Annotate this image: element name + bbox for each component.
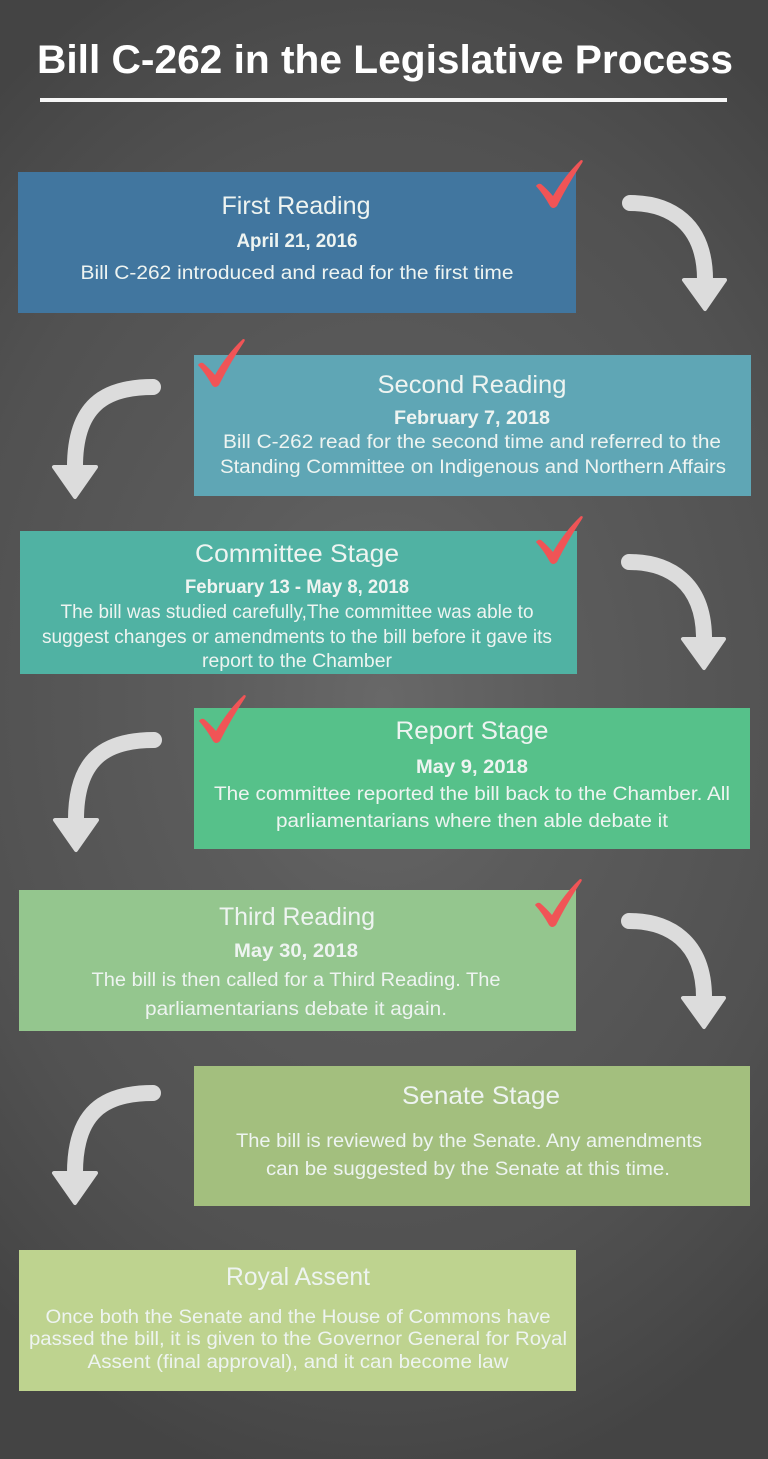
panel: Second Reading [194,355,751,496]
icon: check mark 2 [198,339,245,387]
panel: Third Reading [19,890,576,1031]
panel: Royal Assent: Royal Assent [226,1263,370,1291]
panel: Senate Stage: The bill is reviewed by the Senate. Any amendments [236,1131,702,1152]
panel: Royal Assent: Assent (final approval), and it can become law [88,1352,509,1373]
panel: Report Stage: May 9, 2018 [416,757,528,778]
panel: Report Stage: parliamentarians where then able debate it [276,811,669,832]
icon: check mark 3 [536,516,583,564]
arrow 1 [630,203,725,309]
panel: Committee Stage: report to the Chamber [202,651,393,672]
panel: Report Stage: Report Stage [396,717,548,745]
panel: First Reading: Bill C-262 introduced and read for the first time [80,263,514,284]
panel: Senate Stage [194,1066,750,1206]
panel: Committee Stage: February 13 - May 8, 2018 [185,577,409,598]
panel: Third Reading: The bill is then called for a Third Reading. The [92,970,500,991]
panel: First Reading: First Reading [222,192,370,220]
arrow 6 [54,1093,153,1203]
title: Bill C-262 in the Legislative Process [37,38,733,82]
panel: Third Reading: Third Reading [219,903,375,931]
icon: check mark 5 [535,879,582,927]
arrow 2 [54,387,153,497]
panel: Third Reading: May 30, 2018 [234,941,358,962]
panel: Royal Assent: passed the bill, it is given to the Governor General for Royal [29,1329,567,1350]
icon: check mark 4 [199,695,246,743]
panel: Royal Assent: Once both the Senate and the House of Commons have [46,1307,550,1328]
panel: Third Reading: parliamentarians debate it again. [145,999,447,1020]
panel: Second Reading: Bill C-262 read for the second time and referred to the [223,432,721,453]
panel: Royal Assent [19,1250,576,1391]
panel: Second Reading: February 7, 2018 [394,408,550,429]
arrow 5 [629,921,724,1027]
panel: Committee Stage: suggest changes or amendments to the bill before it gave its [42,627,552,648]
panel: Senate Stage: Senate Stage [402,1082,560,1110]
panel: First Reading: April 21, 2016 [236,231,358,252]
panel: Second Reading: Second Reading [378,371,566,399]
panel: Committee Stage [20,531,577,674]
arrow 3 [629,562,724,668]
panel: Report Stage [194,708,750,849]
panel: First Reading [18,172,576,313]
panel: Report Stage: The committee reported the bill back to the Chamber. All [214,784,730,805]
panel: Committee Stage: The bill was studied carefully,The committee was able to [60,602,534,623]
icon: check mark 1 [536,160,583,208]
title [37,38,733,102]
panel: Senate Stage: can be suggested by the Senate at this time. [266,1159,670,1180]
arrow 4 [55,740,154,850]
panel: Committee Stage: Committee Stage [195,540,399,568]
panel: Second Reading: Standing Committee on Indigenous and Northern Affairs [220,457,726,478]
